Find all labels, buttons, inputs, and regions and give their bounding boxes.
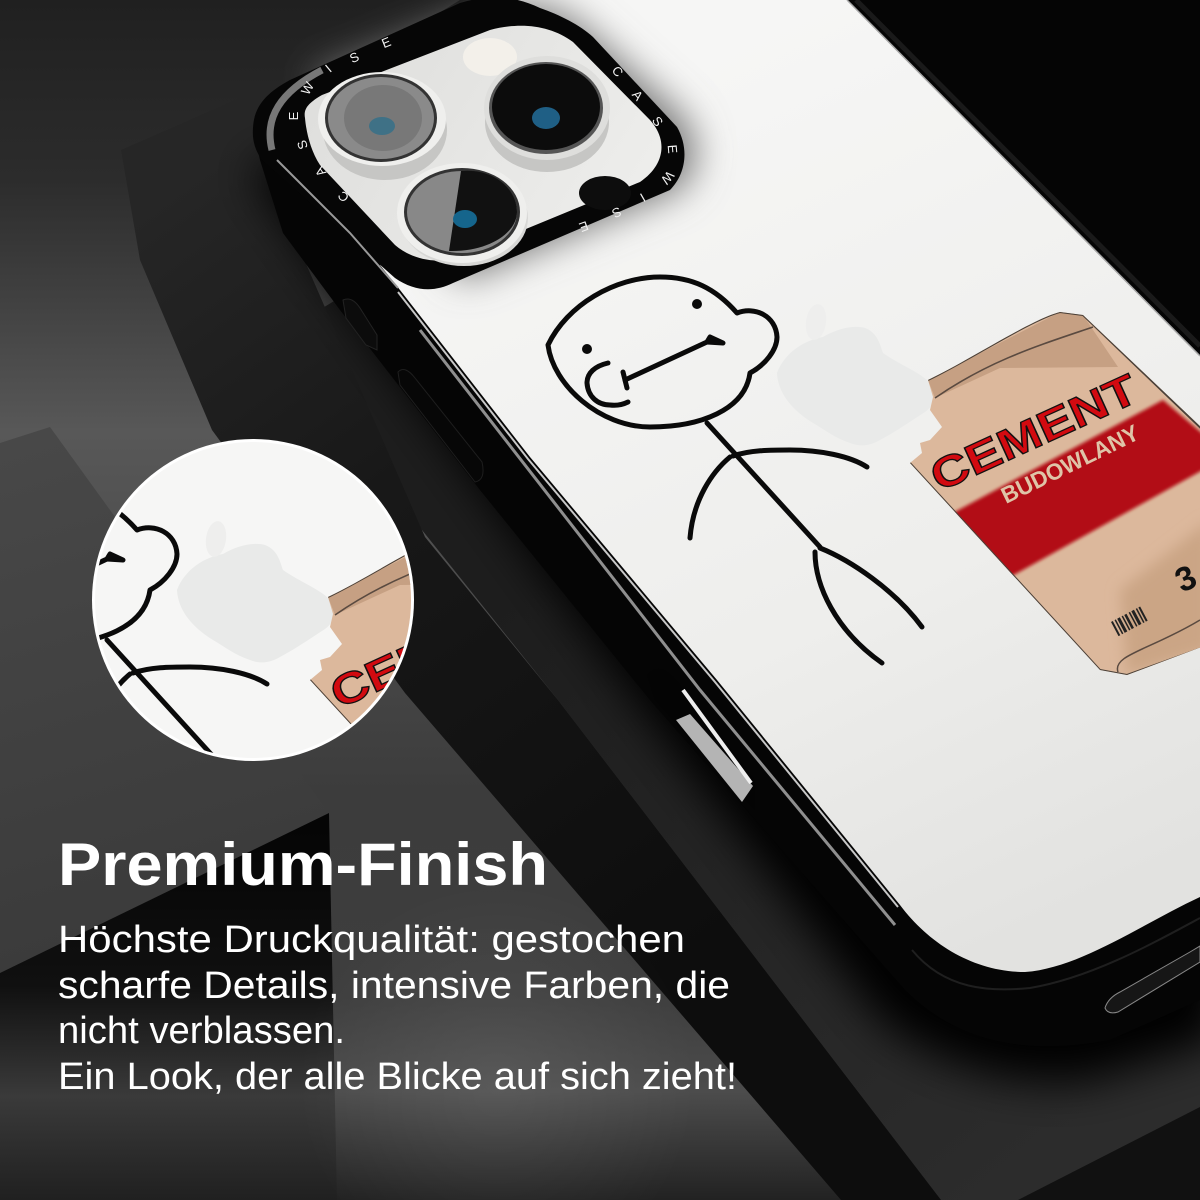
bag outline	[910, 312, 1200, 675]
barcode	[1111, 607, 1148, 636]
island brand text: W	[298, 79, 317, 97]
case edge highlight	[398, 292, 898, 907]
red band	[953, 400, 1200, 577]
description: Höchste Druckqualität: gestochen	[58, 919, 685, 961]
lens: top right	[484, 56, 610, 172]
heading: Premium-Finish	[58, 831, 548, 898]
island brand text: S	[294, 138, 311, 151]
bottom rim line	[912, 918, 1200, 989]
island brand text: E	[577, 218, 590, 235]
floor glow	[290, 880, 700, 1200]
description: nicht verblassen.	[58, 1010, 345, 1052]
top edge rim	[856, 0, 1200, 346]
lens: bottom	[397, 163, 528, 266]
island brand text: S	[649, 113, 666, 129]
island brand text: S	[609, 204, 624, 221]
detail: stick figure	[98, 512, 270, 753]
island brand text: I	[637, 190, 648, 205]
cement bag	[910, 312, 1200, 675]
island brand text: A	[312, 164, 329, 180]
island brand text: C	[609, 63, 626, 80]
phone	[250, 0, 1200, 1082]
case reflection	[420, 330, 895, 925]
bag top flap	[928, 312, 1118, 398]
side button	[647, 669, 755, 810]
rim reflection strip	[270, 70, 322, 150]
stick figure	[548, 277, 922, 663]
zoom detail circle	[92, 439, 414, 761]
lens: main	[318, 72, 447, 180]
bag lower shade	[1120, 520, 1200, 675]
plinth	[121, 90, 941, 1200]
charging port	[1105, 946, 1200, 1013]
bag bottom fold	[1117, 620, 1200, 672]
plinth right face	[270, 200, 1200, 1200]
description: Ein Look, der alle Blicke auf sich zieht!	[58, 1056, 737, 1098]
lower block	[0, 813, 337, 1200]
island brand text: E	[665, 144, 680, 154]
island brand text: E	[286, 111, 301, 120]
island brand text: E	[379, 34, 393, 51]
island brand text: A	[629, 87, 646, 104]
description	[58, 919, 737, 1098]
left block	[0, 427, 329, 973]
rim lower highlight	[277, 160, 398, 288]
phone back	[380, 0, 1200, 972]
floor corner	[1018, 1107, 1200, 1200]
phone shadow	[250, 100, 1200, 1082]
bag subheading: BUDOWLANY	[997, 419, 1143, 508]
top edge highlight	[847, 0, 1200, 356]
detail: cement bag: CEMENT	[323, 582, 545, 718]
description: scharfe Details, intensive Farben, die	[58, 965, 730, 1007]
volume button lower	[398, 370, 483, 482]
camera shadow	[312, 2, 696, 281]
island brand text	[286, 34, 680, 235]
detail: cement bag	[310, 555, 411, 724]
phone body	[253, 0, 1200, 1046]
camera island	[253, 0, 684, 289]
flash	[463, 38, 517, 76]
camera glass	[305, 26, 661, 260]
apple logo	[777, 303, 934, 445]
bag heading: CEMENT	[923, 365, 1145, 501]
island brand text: W	[657, 168, 677, 188]
island brand text: C	[335, 188, 352, 205]
text block	[58, 831, 737, 1098]
microphone dot	[579, 176, 631, 210]
volume button upper	[343, 299, 377, 350]
detail: apple logo	[177, 544, 333, 662]
island frame	[253, 0, 684, 289]
island brand text: S	[347, 49, 362, 66]
bag fold line	[935, 327, 1093, 398]
island brand text: I	[322, 61, 335, 75]
